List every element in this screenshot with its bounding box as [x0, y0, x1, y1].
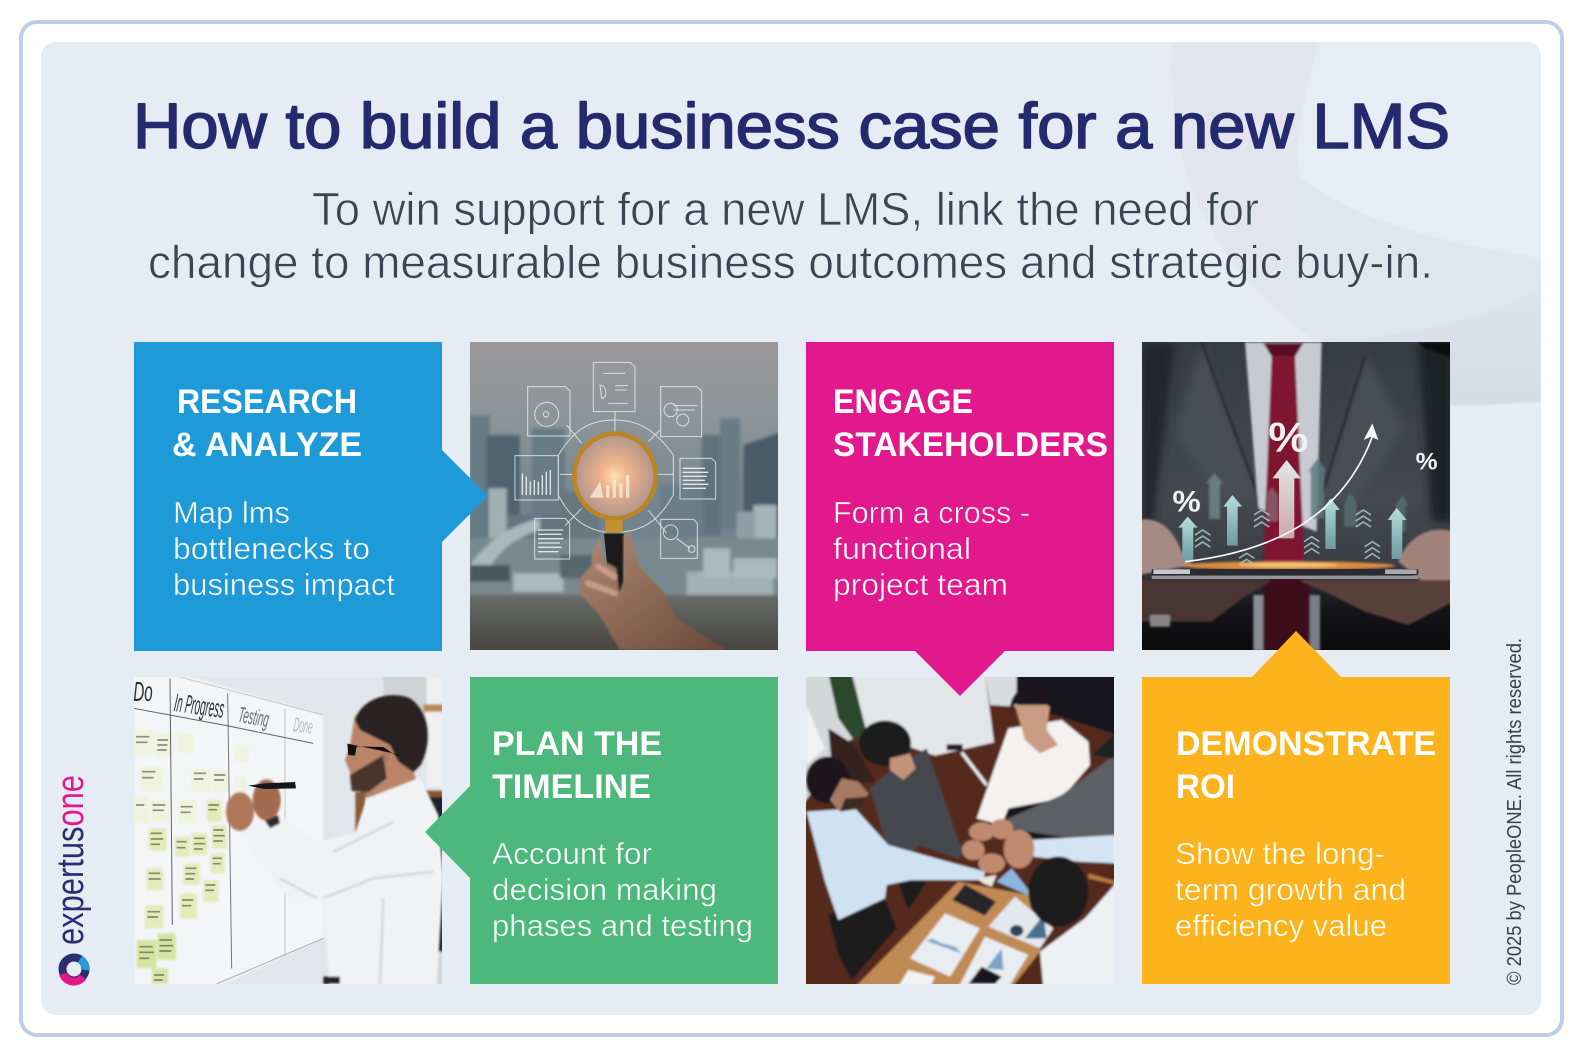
body text: research and analyze: business impact — [173, 567, 395, 602]
tile: engage stakeholders — [806, 342, 1114, 696]
body text: plan the timeline: phases and testing — [492, 908, 753, 943]
body text: research and analyze: Map lms — [173, 495, 290, 530]
photo: man writing on kanban whiteboard: Testing — [236, 702, 271, 732]
heading: engage stakeholders — [833, 383, 1108, 464]
heading: research and analyze: & ANALYZE — [172, 426, 362, 464]
body text: engage stakeholders — [833, 495, 1030, 602]
tile: demonstrate roi — [1142, 631, 1450, 984]
heading: plan the timeline: PLAN THE — [492, 725, 662, 763]
tile: plan the timeline — [425, 677, 778, 984]
body text: demonstrate roi: term growth and — [1175, 872, 1406, 907]
body text: research and analyze — [173, 495, 395, 602]
body text: plan the timeline — [492, 836, 753, 943]
subtitle: To win support for a new LMS, link the need for — [312, 183, 1259, 235]
tile: research and analyze — [134, 342, 488, 651]
body text: demonstrate roi: Show the long- — [1175, 836, 1385, 871]
heading: research and analyze: RESEARCH — [177, 383, 357, 421]
body text: demonstrate roi: efficiency value — [1175, 908, 1387, 943]
heading: demonstrate roi: DEMONSTRATE — [1176, 725, 1436, 763]
photo: magnifying glass over city skyline — [467, 339, 782, 653]
body text: research and analyze: bottlenecks to — [173, 531, 370, 566]
body text: engage stakeholders: functional — [833, 531, 971, 566]
body text: plan the timeline: decision making — [492, 872, 717, 907]
heading: plan the timeline: TIMELINE — [492, 768, 651, 806]
body text: engage stakeholders: Form a cross - — [833, 495, 1030, 530]
body text: engage stakeholders: project team — [833, 567, 1008, 602]
heading: research and analyze — [172, 383, 362, 464]
photo: businessman with tablet and growth chart: % — [1416, 448, 1438, 475]
copyright note: © 2025 by PeopleONE. All rights reserved. — [1504, 638, 1526, 985]
title: How to build a business case for a new LMS — [133, 90, 1450, 162]
body text: demonstrate roi — [1175, 836, 1406, 943]
icon: logo ring — [62, 958, 86, 982]
photo: businessman with tablet and growth chart: % — [1172, 486, 1201, 519]
subtitle — [148, 183, 1433, 288]
photo: man writing on kanban whiteboard: Do — [133, 676, 153, 707]
heading: engage stakeholders: ENGAGE — [833, 383, 973, 421]
photo: man writing on kanban whiteboard — [131, 674, 445, 987]
photo: team joining hands over a table — [803, 674, 1117, 987]
subtitle: change to measurable business outcomes and strategic buy-in. — [148, 236, 1433, 288]
photo: man writing on kanban whiteboard: Done — [292, 714, 314, 739]
body text: plan the timeline: Account for — [492, 836, 652, 871]
logo: expertusone: expertusone — [50, 775, 92, 945]
heading: plan the timeline — [492, 725, 662, 806]
heading: demonstrate roi — [1176, 725, 1436, 806]
heading: engage stakeholders: STAKEHOLDERS — [833, 426, 1108, 464]
photo: businessman with tablet and growth chart: % — [1268, 414, 1308, 461]
heading: demonstrate roi: ROI — [1176, 768, 1235, 806]
photo: businessman with tablet and growth chart — [1139, 339, 1454, 654]
photo: man writing on kanban whiteboard: In Progress — [172, 687, 226, 724]
